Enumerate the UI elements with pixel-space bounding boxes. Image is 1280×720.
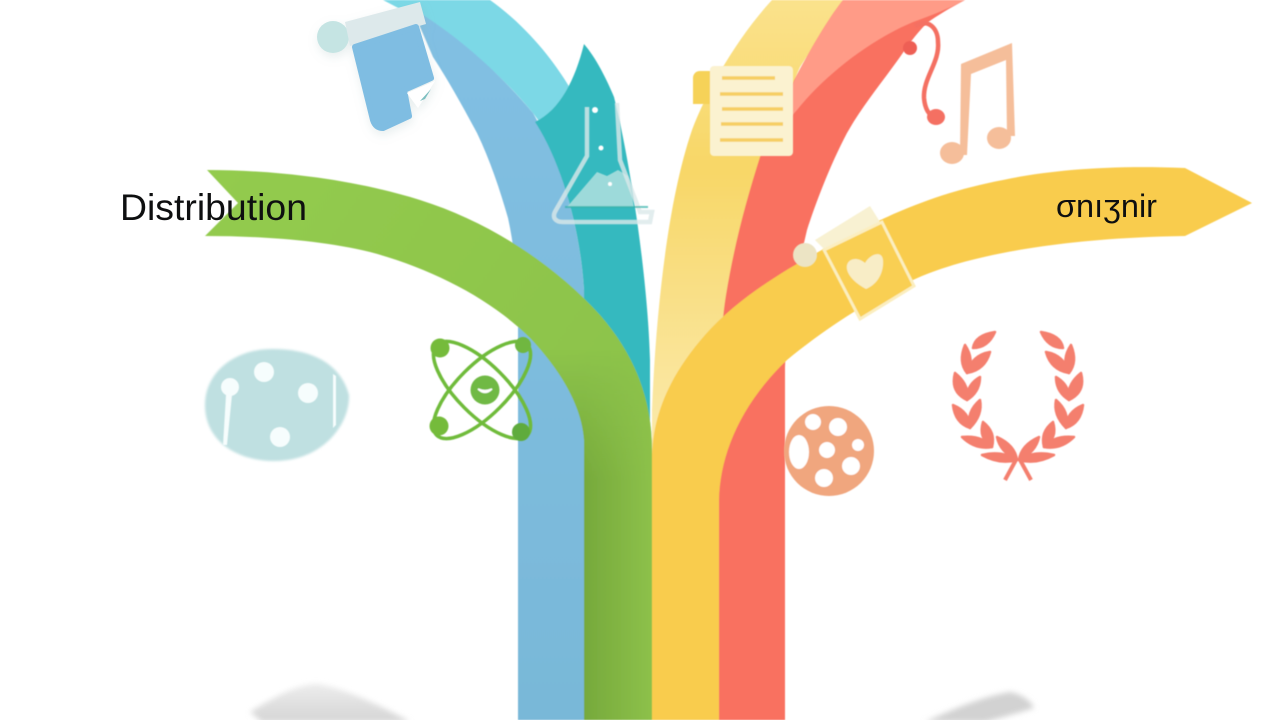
atom nucleus — [470, 376, 500, 404]
icon: note page — [693, 66, 793, 156]
note tab — [693, 71, 712, 104]
icon: flask — [554, 103, 652, 222]
label: right arrow: σnıʒnir — [1056, 188, 1157, 224]
ribbon: yellow arrow to right label — [652, 167, 1252, 720]
ground shadow: right — [925, 692, 1034, 720]
icon: music note — [940, 43, 1015, 164]
note paper — [710, 66, 793, 156]
atom nodes — [430, 338, 450, 358]
ribbon: blue — [412, 8, 584, 720]
flask liquid — [567, 170, 634, 207]
ribbon: cyan top — [383, 0, 570, 150]
document body — [355, 27, 431, 128]
icon: film reel — [784, 406, 874, 496]
ribbon: pale yellow — [652, 0, 843, 460]
ribbon: salmon highlight — [770, 0, 965, 140]
laurel right branch — [1019, 332, 1083, 480]
atom orbits — [419, 327, 545, 453]
icon: atom — [419, 327, 545, 453]
icon: palette — [205, 349, 349, 461]
icon: laurel wreath — [953, 332, 1083, 480]
tag body — [824, 222, 914, 319]
heart — [847, 254, 883, 289]
scroll bar — [345, 2, 426, 46]
ground shadow: left — [250, 684, 410, 720]
label: Distribution: Distribution — [120, 187, 307, 228]
tag knob — [793, 243, 817, 267]
flask glass — [554, 103, 652, 222]
palette body — [205, 349, 349, 461]
page fold — [407, 81, 435, 108]
ribbon: red — [719, 0, 965, 720]
tag top strip — [815, 206, 880, 250]
icon: document scroll — [317, 2, 435, 128]
icon: heart tag — [793, 206, 914, 319]
scroll knob — [317, 21, 349, 53]
laurel left branch — [953, 332, 1017, 480]
palette holes — [221, 362, 336, 447]
bubbles — [592, 107, 598, 113]
flask level line — [565, 206, 648, 208]
note lines — [720, 78, 783, 140]
ribbon: teal — [535, 44, 650, 480]
icon: earbud cord — [903, 23, 945, 125]
green column shade — [570, 390, 652, 720]
ribbon: green arrow to Distribution — [205, 170, 652, 720]
